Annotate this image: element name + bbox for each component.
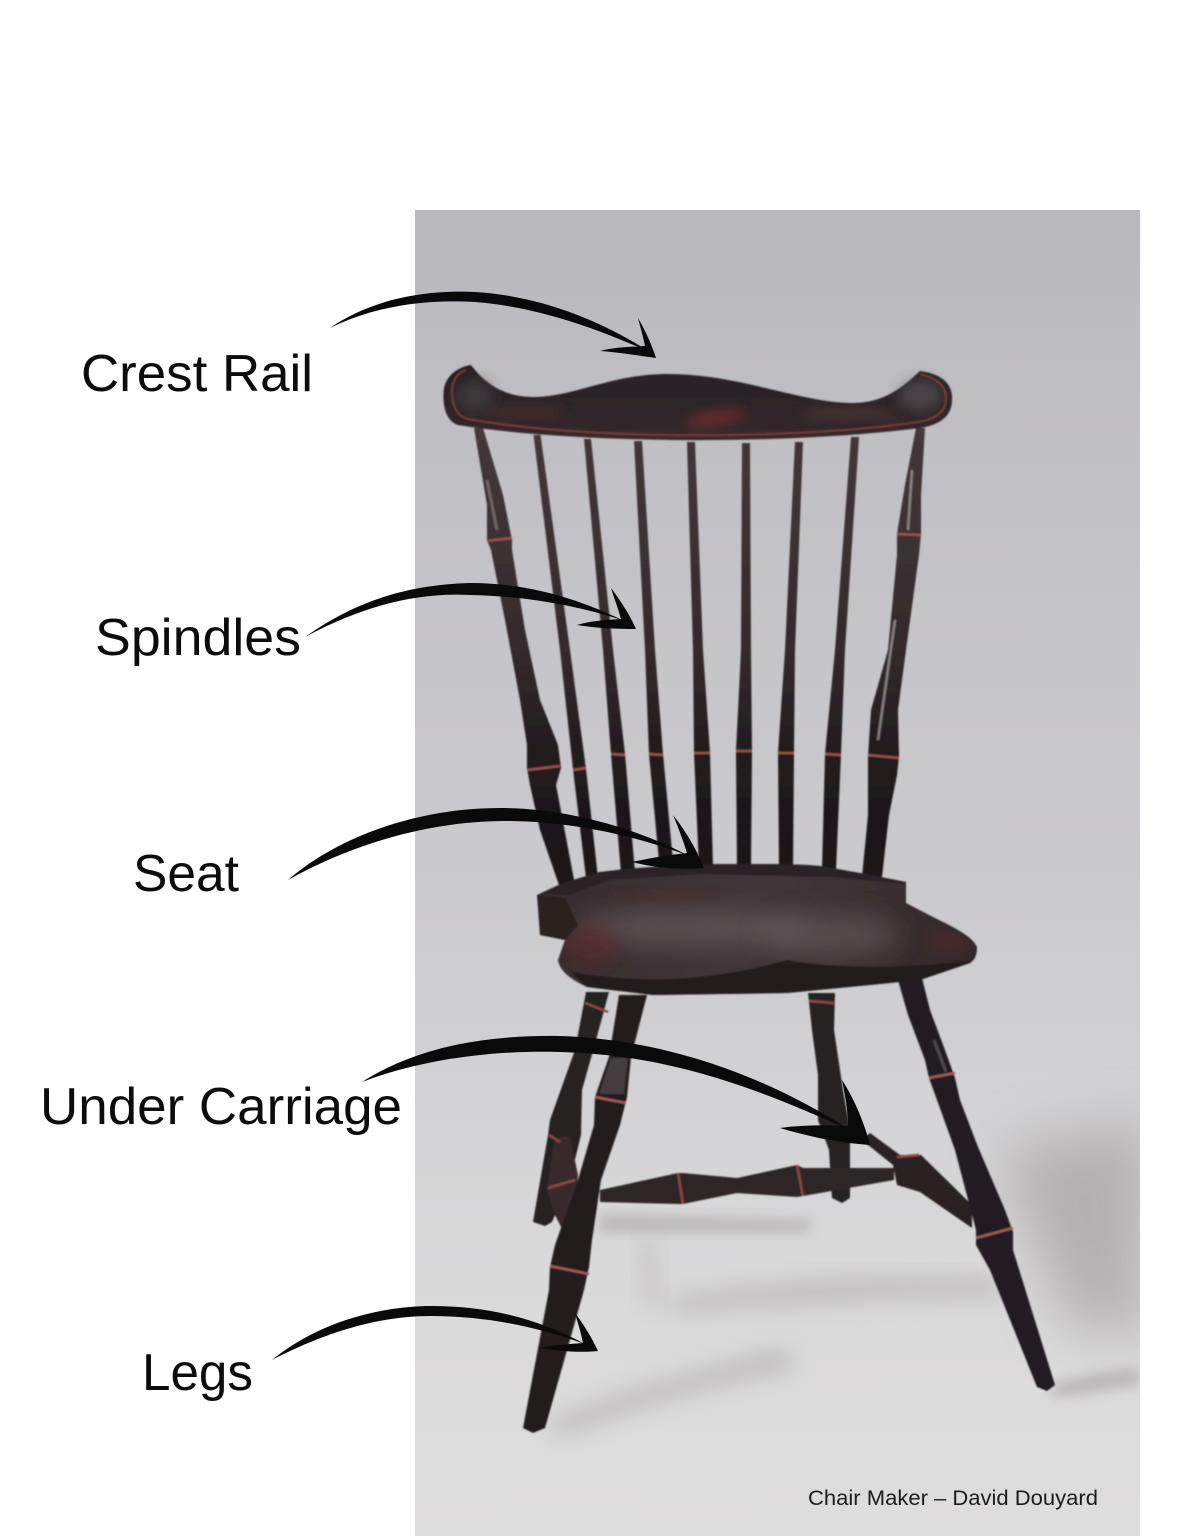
chair (443, 365, 1055, 1433)
arrow: to crest rail (330, 292, 656, 358)
back posts (474, 428, 925, 888)
label: Crest Rail: Crest Rail (81, 345, 313, 403)
front legs (523, 978, 1055, 1433)
arrow: to seat (288, 808, 704, 880)
label: Spindles: Spindles (95, 609, 301, 667)
spindles (534, 435, 859, 878)
back legs and undercarriage (533, 992, 972, 1235)
arrow: to legs (272, 1306, 598, 1360)
seat (537, 862, 977, 1000)
photo panel: chair on grey backdrop (415, 210, 1150, 1536)
label: Seat: Seat (133, 845, 240, 903)
label: Legs: Legs (142, 1344, 253, 1402)
arrow: to under carriage (362, 1036, 870, 1145)
label: Under Carriage: Under Carriage (40, 1078, 402, 1136)
crest rail (443, 365, 952, 440)
credit: chair maker: Chair Maker – David Douyard (808, 1487, 1098, 1510)
arrow: to spindles (305, 583, 636, 637)
